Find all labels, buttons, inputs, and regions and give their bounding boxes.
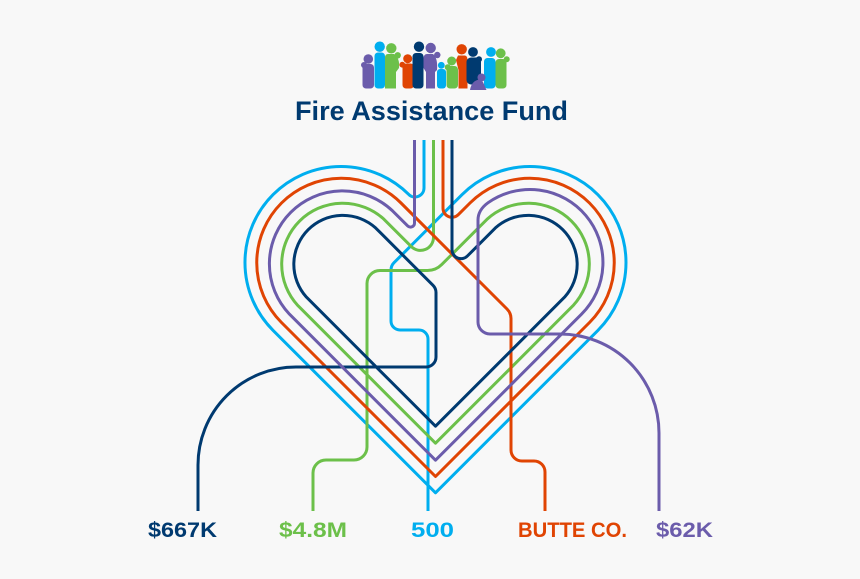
label: $62K: $62K [656,519,713,542]
label: 500: 500 [411,519,454,542]
line: Butte Co. (orange) [257,140,614,511]
heart line chart [198,140,659,511]
line: $62K (purple) [269,140,659,511]
label: Butte Co.: BUTTE CO. [518,519,627,542]
line: $667K (navy) [198,140,577,511]
label: $667K: $667K [148,519,217,542]
icon: group of people [361,42,510,90]
line: 500 (blue) [245,140,626,511]
label: $4.8M: $4.8M [279,519,347,542]
line: $4.8M (green) [282,140,589,511]
title: Fire Assistance Fund [295,96,568,126]
